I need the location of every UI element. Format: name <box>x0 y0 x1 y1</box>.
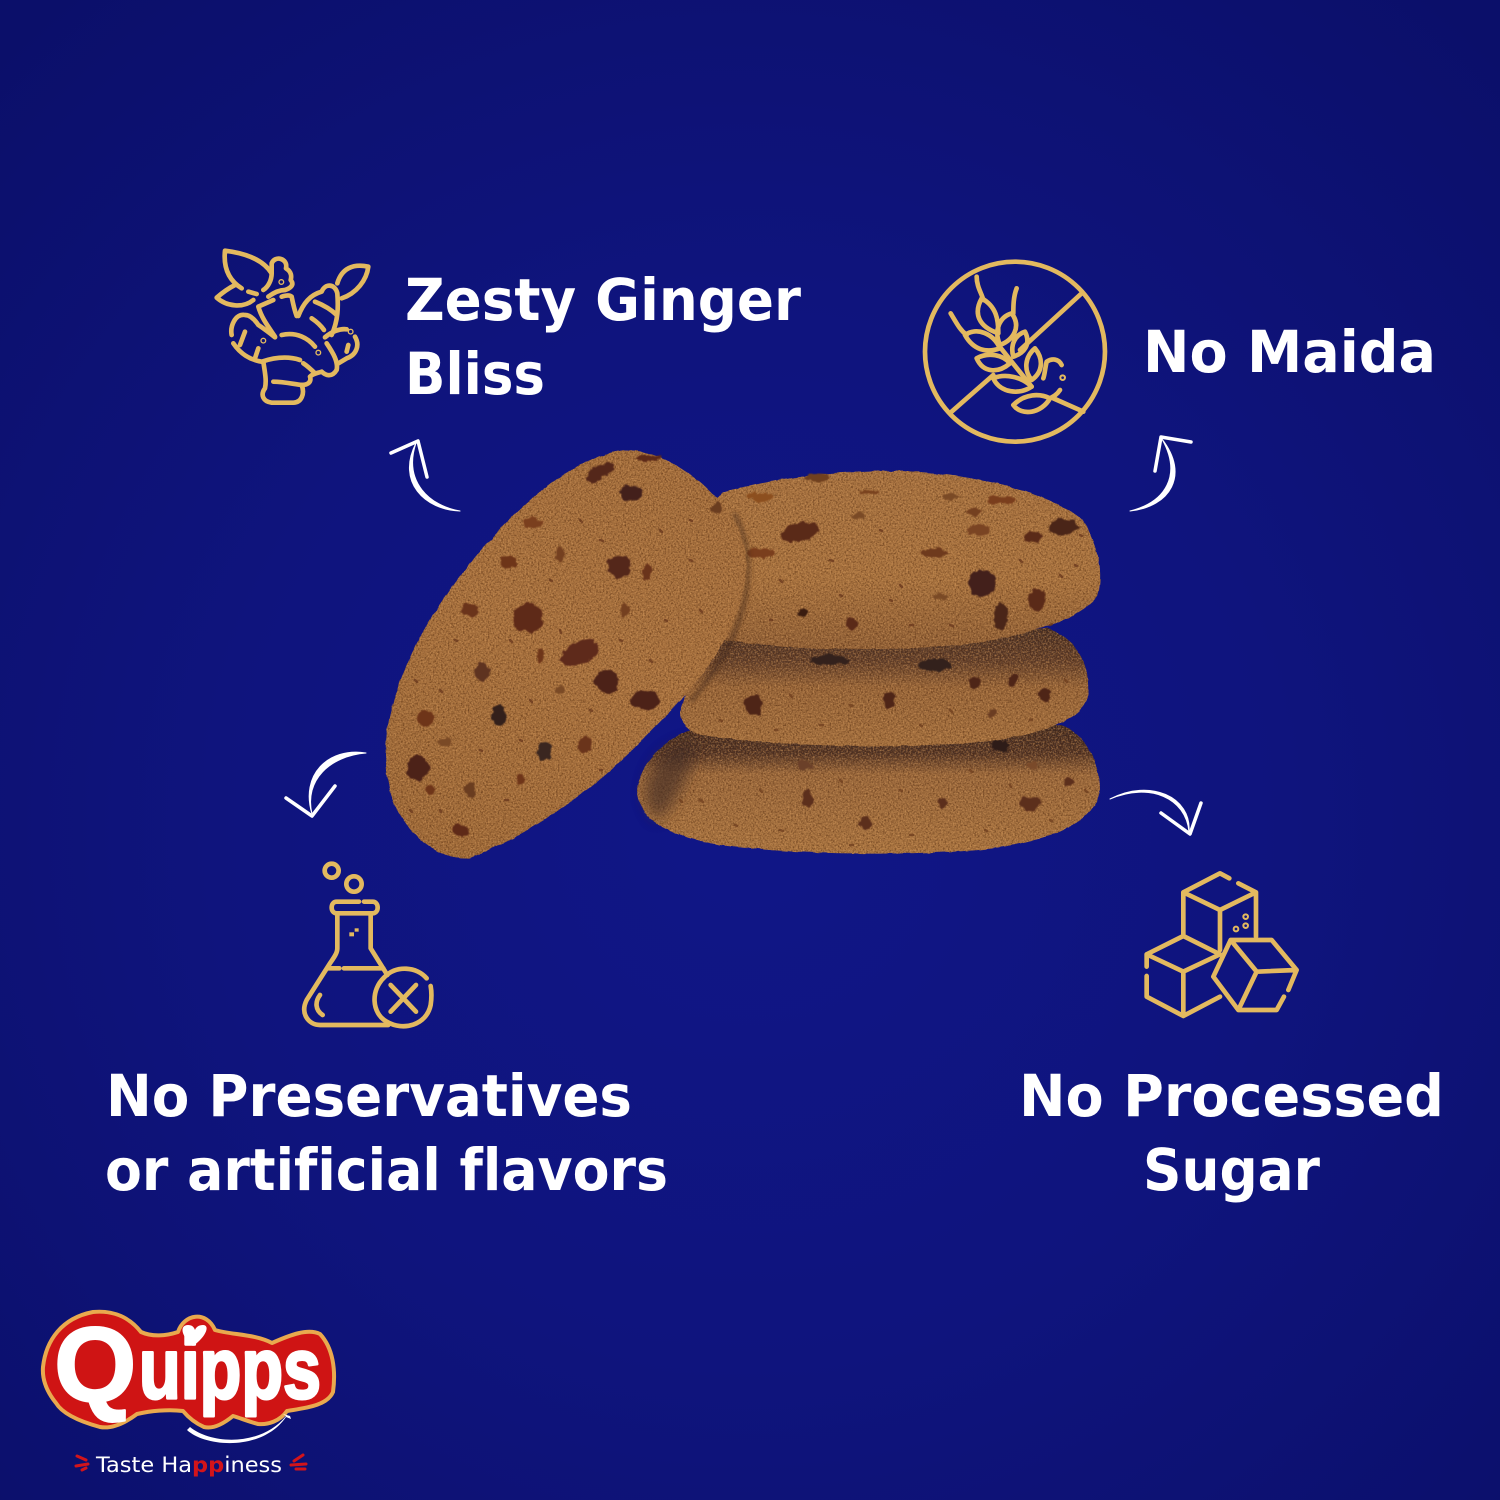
tagline splash marks <box>76 1455 306 1470</box>
tagline: Taste Ha ppiness <box>95 1453 282 1477</box>
heading: No Processed Sugar: No Processed <box>1019 1062 1444 1130</box>
tilted cookie contact shadow <box>692 515 748 700</box>
heading: No Preservatives or artificial flavors: No Preservatives <box>106 1062 632 1130</box>
heading: No Preservatives or artificial flavors: or artificial flavors <box>105 1136 668 1204</box>
heading: No Maida: No Maida <box>1143 318 1436 386</box>
logo wordmark: Q <box>54 1306 136 1424</box>
top cookie <box>712 471 1100 649</box>
heading: Zesty Ginger Bliss: Bliss <box>405 340 545 408</box>
arrow: to no maida <box>1130 437 1191 511</box>
heading: No Processed Sugar <box>1019 1062 1444 1204</box>
middle cookie <box>680 628 1088 746</box>
icon: ginger <box>217 251 368 403</box>
icon: sugar cubes <box>1147 873 1297 1016</box>
arrow: to no processed sugar <box>1110 790 1201 834</box>
logo wordmark: uipps <box>139 1321 321 1417</box>
cookie stack photo <box>386 450 1100 858</box>
heading: Zesty Ginger Bliss: Zesty Ginger <box>405 266 801 334</box>
logo smile <box>187 1414 291 1443</box>
logo: Quipps <box>43 1306 334 1477</box>
icon: no wheat <box>925 262 1105 442</box>
logo badge outline <box>43 1312 334 1428</box>
arrow: to no preservatives <box>286 752 366 816</box>
logo heart <box>183 1325 207 1346</box>
arrow: to ginger <box>391 441 460 511</box>
heading: No Processed Sugar: Sugar <box>1143 1136 1320 1204</box>
bottom cookie <box>637 725 1100 854</box>
heading: No Preservatives or artificial flavors <box>105 1062 668 1204</box>
tilted front cookie <box>386 450 746 858</box>
icon: flask with cross <box>304 864 431 1026</box>
heading: Zesty Ginger Bliss <box>405 266 801 408</box>
